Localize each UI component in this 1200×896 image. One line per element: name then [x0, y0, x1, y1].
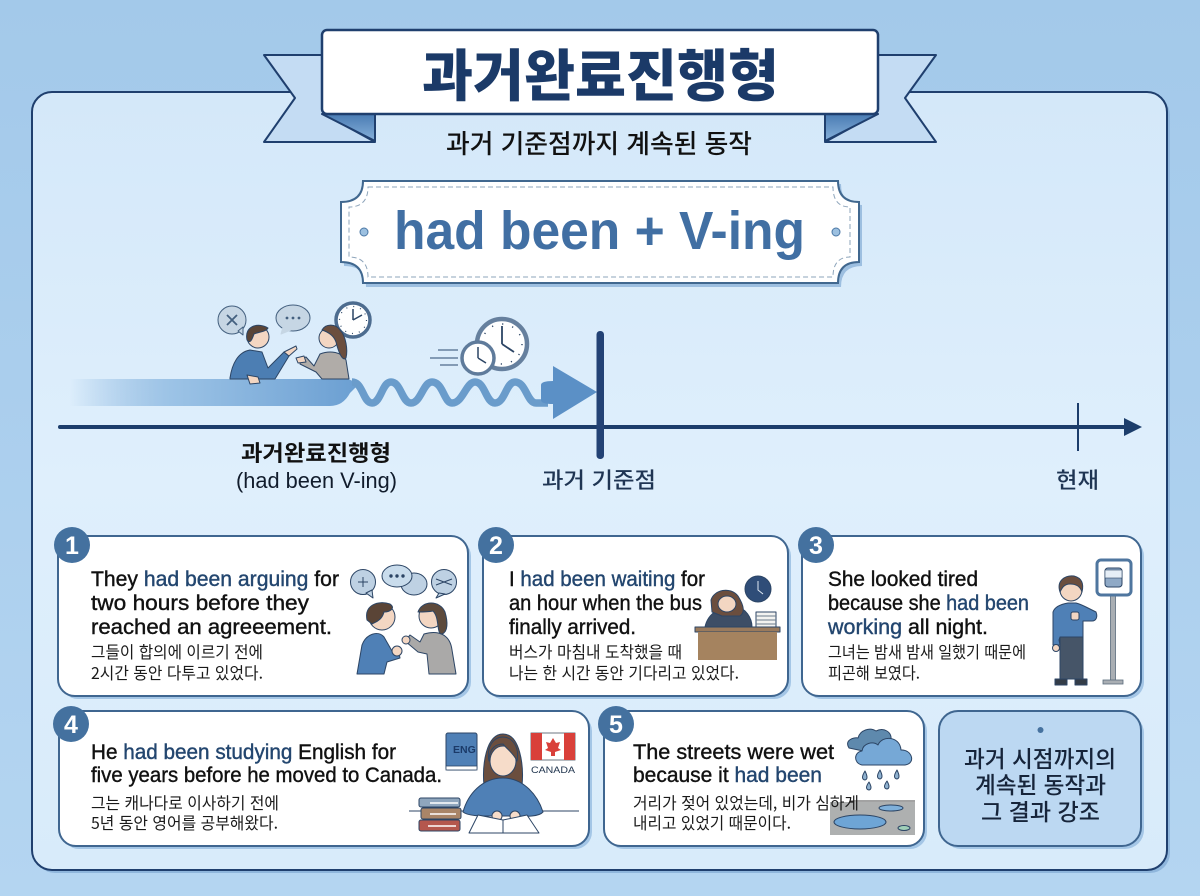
summary text: 과거 시점까지의	[964, 740, 1116, 774]
translation 4	[91, 790, 279, 834]
sentence 4: five years before he moved to Canada.	[91, 763, 442, 787]
badge 5	[598, 706, 634, 742]
icon: puddle	[830, 801, 915, 835]
sentence 2	[509, 567, 705, 639]
ribbon right fold	[825, 114, 878, 141]
translation 3: 그녀는 밤새 밤새 일했기 때문에	[828, 639, 1026, 663]
axis arrow	[1124, 418, 1142, 436]
banner	[322, 30, 878, 114]
formula plaque	[341, 181, 862, 287]
summary text: 그 결과 강조	[981, 793, 1100, 827]
arrow head	[541, 366, 597, 419]
translation 1	[91, 639, 263, 684]
translation 4: 5년 동안 영어를 공부해왔다.	[91, 810, 278, 834]
title: 과거완료진행형	[422, 32, 779, 113]
translation 5: 내리고 있었기 때문이다.	[633, 810, 791, 834]
icon: studying woman	[409, 734, 579, 833]
translation 1: 그들이 합의에 이르기 전에	[91, 639, 263, 663]
badge 2: 2	[489, 532, 503, 560]
sentence 5	[633, 740, 834, 787]
ribbon left fold	[322, 114, 375, 141]
translation 2: 버스가 마침내 도착했을 때	[509, 639, 682, 663]
card 4	[53, 706, 592, 849]
duration band	[70, 379, 358, 406]
formula text: had been + V-ing	[394, 201, 805, 261]
translation 5: 거리가 젖어 있었는데, 비가 심하게	[633, 790, 859, 814]
wave	[352, 382, 548, 403]
past reference bar	[596, 331, 604, 459]
badge 3	[798, 527, 834, 563]
icon: tired woman at desk	[695, 576, 780, 660]
label: tense: 과거완료진행형	[241, 436, 391, 468]
sentence 5: because it had been	[633, 763, 822, 787]
icon: man checking watch	[1052, 576, 1097, 685]
ribbon right tail	[825, 55, 936, 142]
translation 2	[509, 639, 739, 684]
time axis	[60, 425, 1128, 429]
label: past point: 과거 기준점	[542, 463, 656, 495]
sentence 3: because she had been	[828, 591, 1029, 615]
sentence 2: an hour when the bus	[509, 591, 702, 615]
sentence 1: two hours before they	[91, 591, 309, 615]
title ribbon	[264, 30, 936, 142]
translation 1: 2시간 동안 다투고 있었다.	[91, 660, 263, 684]
icon: bus stop sign	[1097, 560, 1131, 684]
present tick	[1077, 403, 1079, 451]
badge 4: 4	[64, 711, 78, 739]
icon: ENG book: ENG	[453, 744, 476, 756]
badge 5: 5	[609, 711, 623, 739]
badge 4	[53, 706, 89, 742]
sentence 3: working all night.	[827, 615, 988, 639]
icon: Canada flag: CANADA	[531, 765, 576, 776]
sentence 5: The streets were wet	[633, 740, 834, 764]
icon: rain cloud	[848, 729, 912, 790]
sentence 2: finally arrived.	[509, 615, 636, 639]
badge 2	[478, 527, 514, 563]
sentence 3	[827, 567, 1029, 639]
badge 1	[54, 527, 90, 563]
translation 2: 나는 한 시간 동안 기다리고 있었다.	[509, 660, 739, 684]
sentence 4	[91, 740, 442, 787]
ribbon left tail	[264, 55, 375, 142]
sentence 1: reached an agreeement.	[91, 615, 332, 639]
summary box	[939, 711, 1144, 849]
card 5	[598, 706, 927, 849]
card 3	[798, 527, 1144, 699]
icon: clocks	[430, 319, 527, 374]
summary text: 계속된 동작과	[975, 766, 1106, 800]
timeline	[60, 331, 1142, 495]
icon: two people arguing	[350, 565, 456, 674]
sentence 3: She looked tired	[828, 567, 978, 591]
label: now: 현재	[1056, 463, 1099, 495]
translation 3	[828, 639, 1026, 684]
translation 4: 그는 캐나다로 이사하기 전에	[91, 790, 279, 814]
label: form: (had been V-ing)	[236, 468, 397, 493]
sentence 2: I had been waiting for	[509, 567, 705, 591]
card 2	[478, 527, 791, 699]
subtitle: 과거 기준점까지 계속된 동작	[446, 124, 752, 161]
translation 3: 피곤해 보였다.	[828, 660, 920, 684]
sentence 1: They had been arguing for	[91, 567, 339, 591]
sentence 1	[91, 567, 339, 639]
card 1	[54, 527, 471, 699]
sentence 4: He had been studying English for	[91, 740, 396, 764]
badge 3: 3	[809, 532, 823, 560]
summary text	[964, 740, 1116, 827]
icon: arguing couple	[218, 303, 370, 384]
translation 5	[633, 790, 859, 834]
icon: Canada flag	[531, 733, 576, 776]
badge 1: 1	[65, 532, 79, 560]
icon: ENG book	[446, 733, 477, 770]
